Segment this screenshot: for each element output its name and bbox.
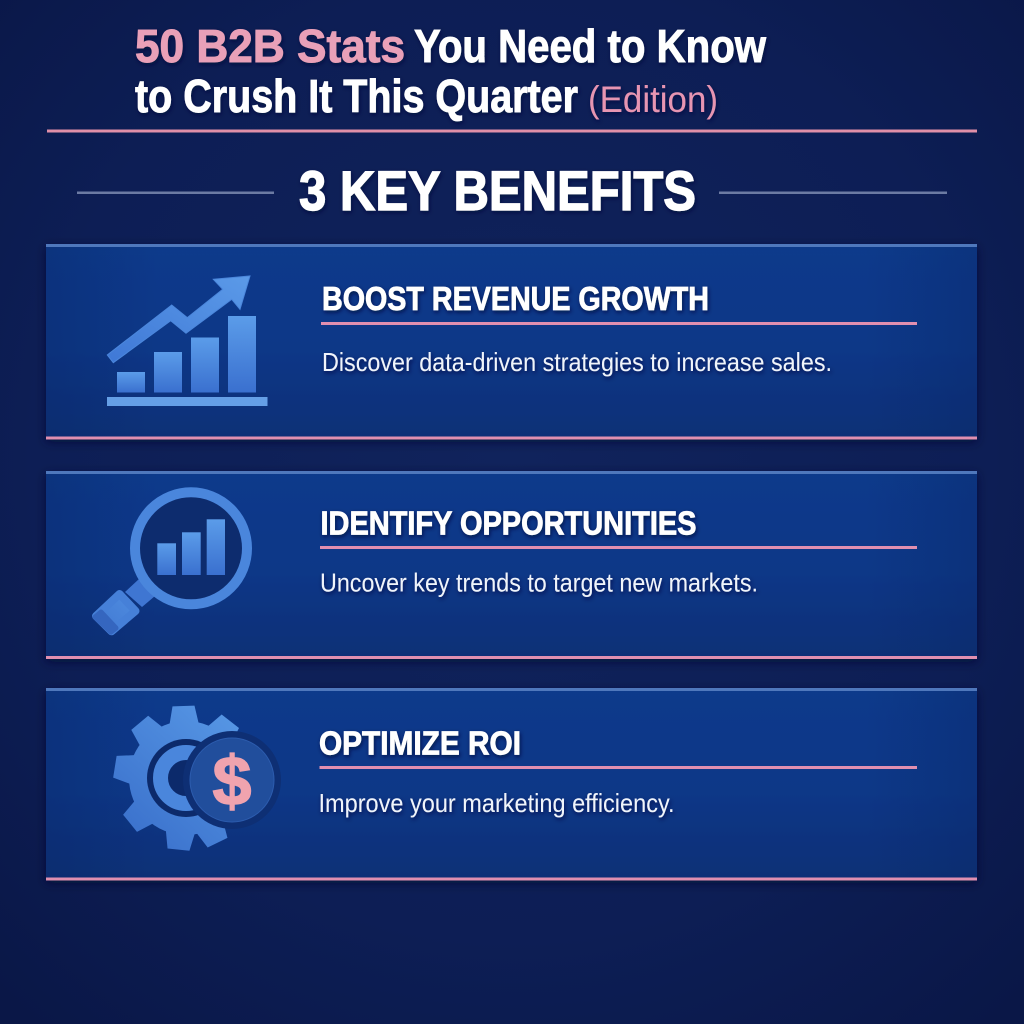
- icon: magnifying glass with chart: [95, 492, 247, 632]
- title: to Crush It This Quarter: [135, 70, 578, 122]
- title: [135, 20, 766, 122]
- title: (Edition): [588, 79, 718, 120]
- text: optimize roi description: Improve your marketing efficiency.: [318, 788, 674, 818]
- icon: gear with dollar coin: $: [213, 742, 251, 820]
- heading: identify opportunities: IDENTIFY OPPORTUNITIES: [320, 504, 696, 541]
- panel: boost revenue growth: [46, 244, 977, 440]
- icon: gear with dollar coin: [113, 706, 281, 851]
- panel: optimize roi: [46, 688, 977, 880]
- heading: boost revenue growth: BOOST REVENUE GROWTH: [322, 280, 709, 317]
- text: boost revenue description: Discover data-driven strategies to increase sales.: [322, 347, 832, 377]
- title: 50 B2B Stats: [135, 20, 405, 72]
- icon: growth chart with arrow: [107, 276, 268, 406]
- heading: optimize roi: OPTIMIZE ROI: [319, 724, 521, 761]
- section heading: 3 key benefits: 3 KEY BENEFITS: [299, 159, 696, 222]
- panel: identify opportunities: [46, 471, 977, 659]
- title: You Need to Know: [414, 20, 766, 72]
- text: identify opportunities description: Uncover key trends to target new markets.: [320, 568, 758, 598]
